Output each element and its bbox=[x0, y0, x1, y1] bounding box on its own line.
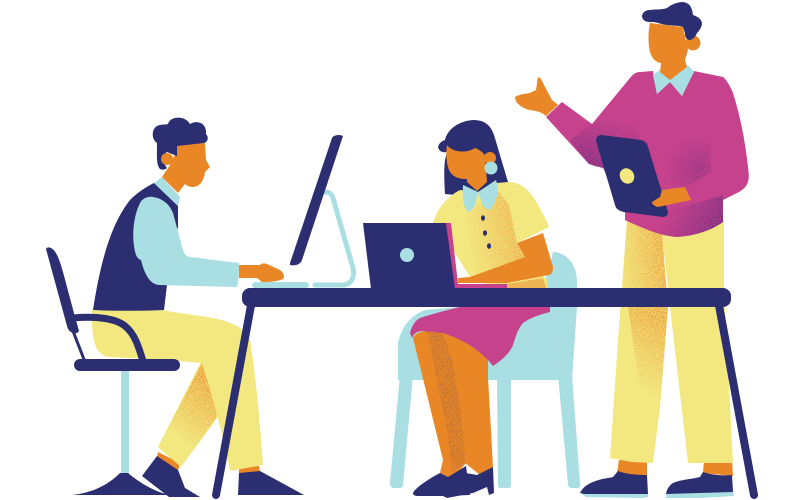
back shoe bbox=[142, 456, 200, 497]
backrest bbox=[46, 247, 79, 333]
ear bbox=[484, 152, 496, 164]
right shoe sole bbox=[666, 491, 734, 498]
back leg shading bbox=[158, 363, 220, 467]
hair bbox=[153, 118, 208, 170]
collar bbox=[154, 177, 180, 206]
left shoe sole bbox=[580, 492, 648, 498]
laptop bbox=[363, 223, 507, 289]
monitor stand bbox=[315, 192, 354, 285]
left sock bbox=[617, 460, 647, 476]
backrest strut bbox=[73, 331, 85, 362]
desk right leg bbox=[718, 300, 754, 495]
left leg lower shading bbox=[628, 307, 668, 430]
left trouser leg bbox=[610, 220, 668, 463]
man at computer: figure bbox=[92, 118, 304, 497]
hand on tablet bbox=[652, 187, 691, 207]
monitor screen bbox=[290, 135, 343, 265]
armrest bbox=[73, 317, 143, 361]
left leg upper shading bbox=[622, 220, 668, 307]
laptop edge and base bbox=[446, 223, 507, 289]
desk top bbox=[242, 288, 731, 307]
blouse bbox=[433, 182, 549, 277]
chair leg left bbox=[390, 375, 413, 488]
man at computer: chair bbox=[72, 368, 170, 495]
head and neck bbox=[648, 23, 688, 80]
blouse shading bbox=[466, 190, 525, 277]
chair leg right bbox=[558, 375, 580, 488]
front shoe bbox=[238, 471, 304, 495]
ear bbox=[161, 153, 173, 165]
tablet logo bbox=[617, 166, 637, 186]
front shoe sock bbox=[239, 466, 260, 474]
desk bbox=[216, 288, 754, 495]
tablet bbox=[596, 135, 668, 217]
sweater arm shading bbox=[570, 110, 640, 168]
woman's chair bbox=[390, 252, 580, 488]
chair base bbox=[72, 473, 170, 495]
trousers bbox=[92, 310, 263, 471]
laptop logo bbox=[400, 248, 414, 262]
hair bbox=[438, 120, 509, 200]
raised hand bbox=[515, 77, 558, 116]
torso lower bbox=[470, 250, 548, 290]
skirt bbox=[410, 307, 550, 366]
collar right bbox=[478, 180, 498, 210]
computer monitor and keyboard bbox=[252, 135, 354, 288]
keyboard bbox=[252, 282, 309, 288]
neck and head bbox=[162, 143, 210, 193]
forearm bbox=[458, 233, 553, 283]
blouse buttons bbox=[481, 215, 491, 249]
left shoe bbox=[580, 471, 648, 494]
sleeve bbox=[133, 197, 239, 287]
back leg bbox=[413, 331, 468, 477]
sweater hem shading bbox=[625, 195, 723, 237]
collar left bbox=[463, 185, 478, 212]
chair pole bbox=[121, 368, 129, 474]
man at computer: chair backrest and seat bbox=[46, 247, 180, 371]
right shoe bbox=[666, 472, 733, 494]
back trouser leg bbox=[158, 360, 225, 467]
sweater bbox=[546, 71, 749, 237]
chair leg middle bbox=[497, 375, 511, 488]
waist shading bbox=[507, 278, 547, 290]
earring bbox=[484, 162, 498, 174]
seat bbox=[74, 359, 180, 371]
ear bbox=[686, 36, 700, 50]
back shoe sock bbox=[157, 452, 180, 471]
collar bbox=[653, 65, 694, 96]
desk left leg bbox=[216, 300, 252, 495]
laptop lid bbox=[363, 223, 455, 289]
right shoe bbox=[443, 467, 494, 498]
woman seated at laptop bbox=[410, 120, 553, 498]
hand bbox=[239, 263, 284, 282]
hair bbox=[642, 2, 702, 40]
right sock bbox=[703, 460, 733, 476]
left shoe bbox=[413, 466, 470, 496]
right trouser leg bbox=[662, 220, 733, 463]
back leg shading bbox=[427, 331, 465, 472]
sweater body shading bbox=[666, 140, 711, 196]
front leg bbox=[443, 333, 493, 475]
standing man with tablet bbox=[515, 2, 749, 498]
chair back and seat bbox=[398, 252, 577, 380]
face and neck bbox=[446, 145, 487, 191]
vest bbox=[93, 183, 178, 311]
